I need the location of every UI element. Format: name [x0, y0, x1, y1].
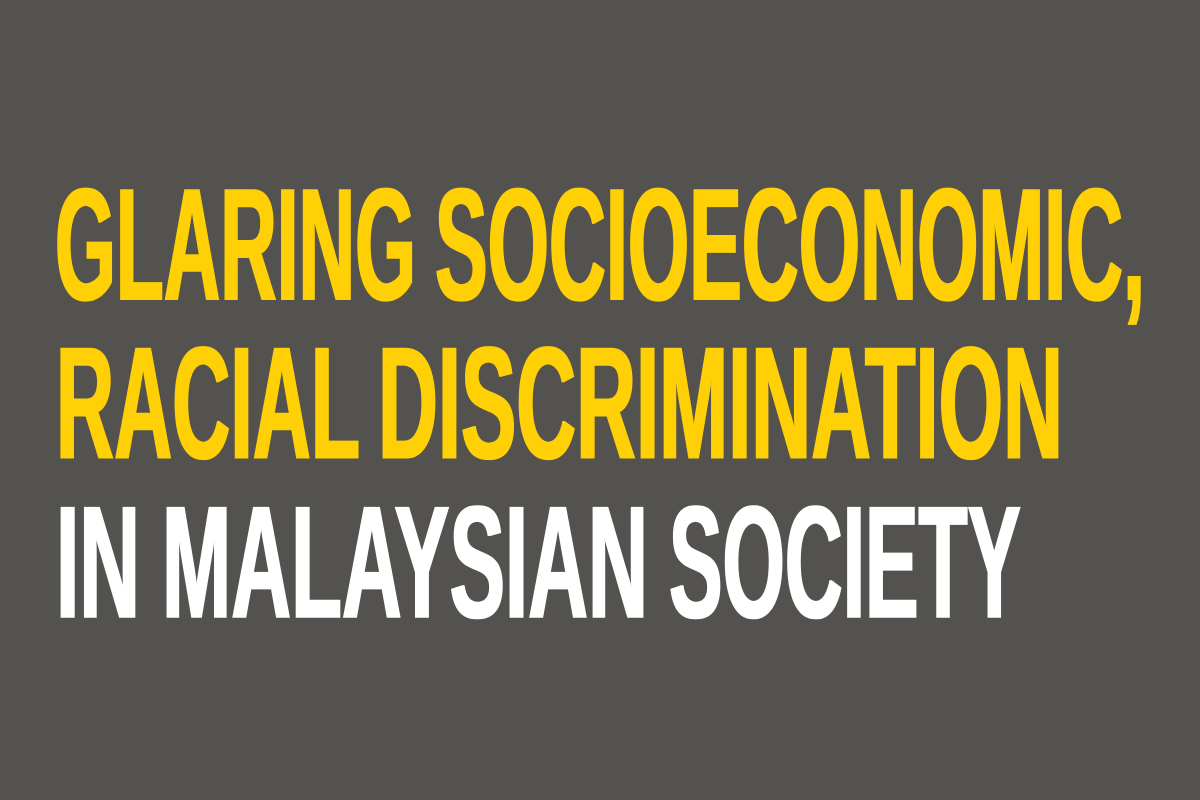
title line 3: IN	[56, 473, 140, 653]
title	[55, 155, 1145, 653]
title line 1	[55, 155, 1145, 335]
title line 2: RACIAL	[56, 314, 360, 494]
title line 3: MALAYSIAN	[162, 473, 648, 653]
title line 1: GLARING	[55, 155, 416, 335]
title line 2	[56, 314, 1063, 494]
